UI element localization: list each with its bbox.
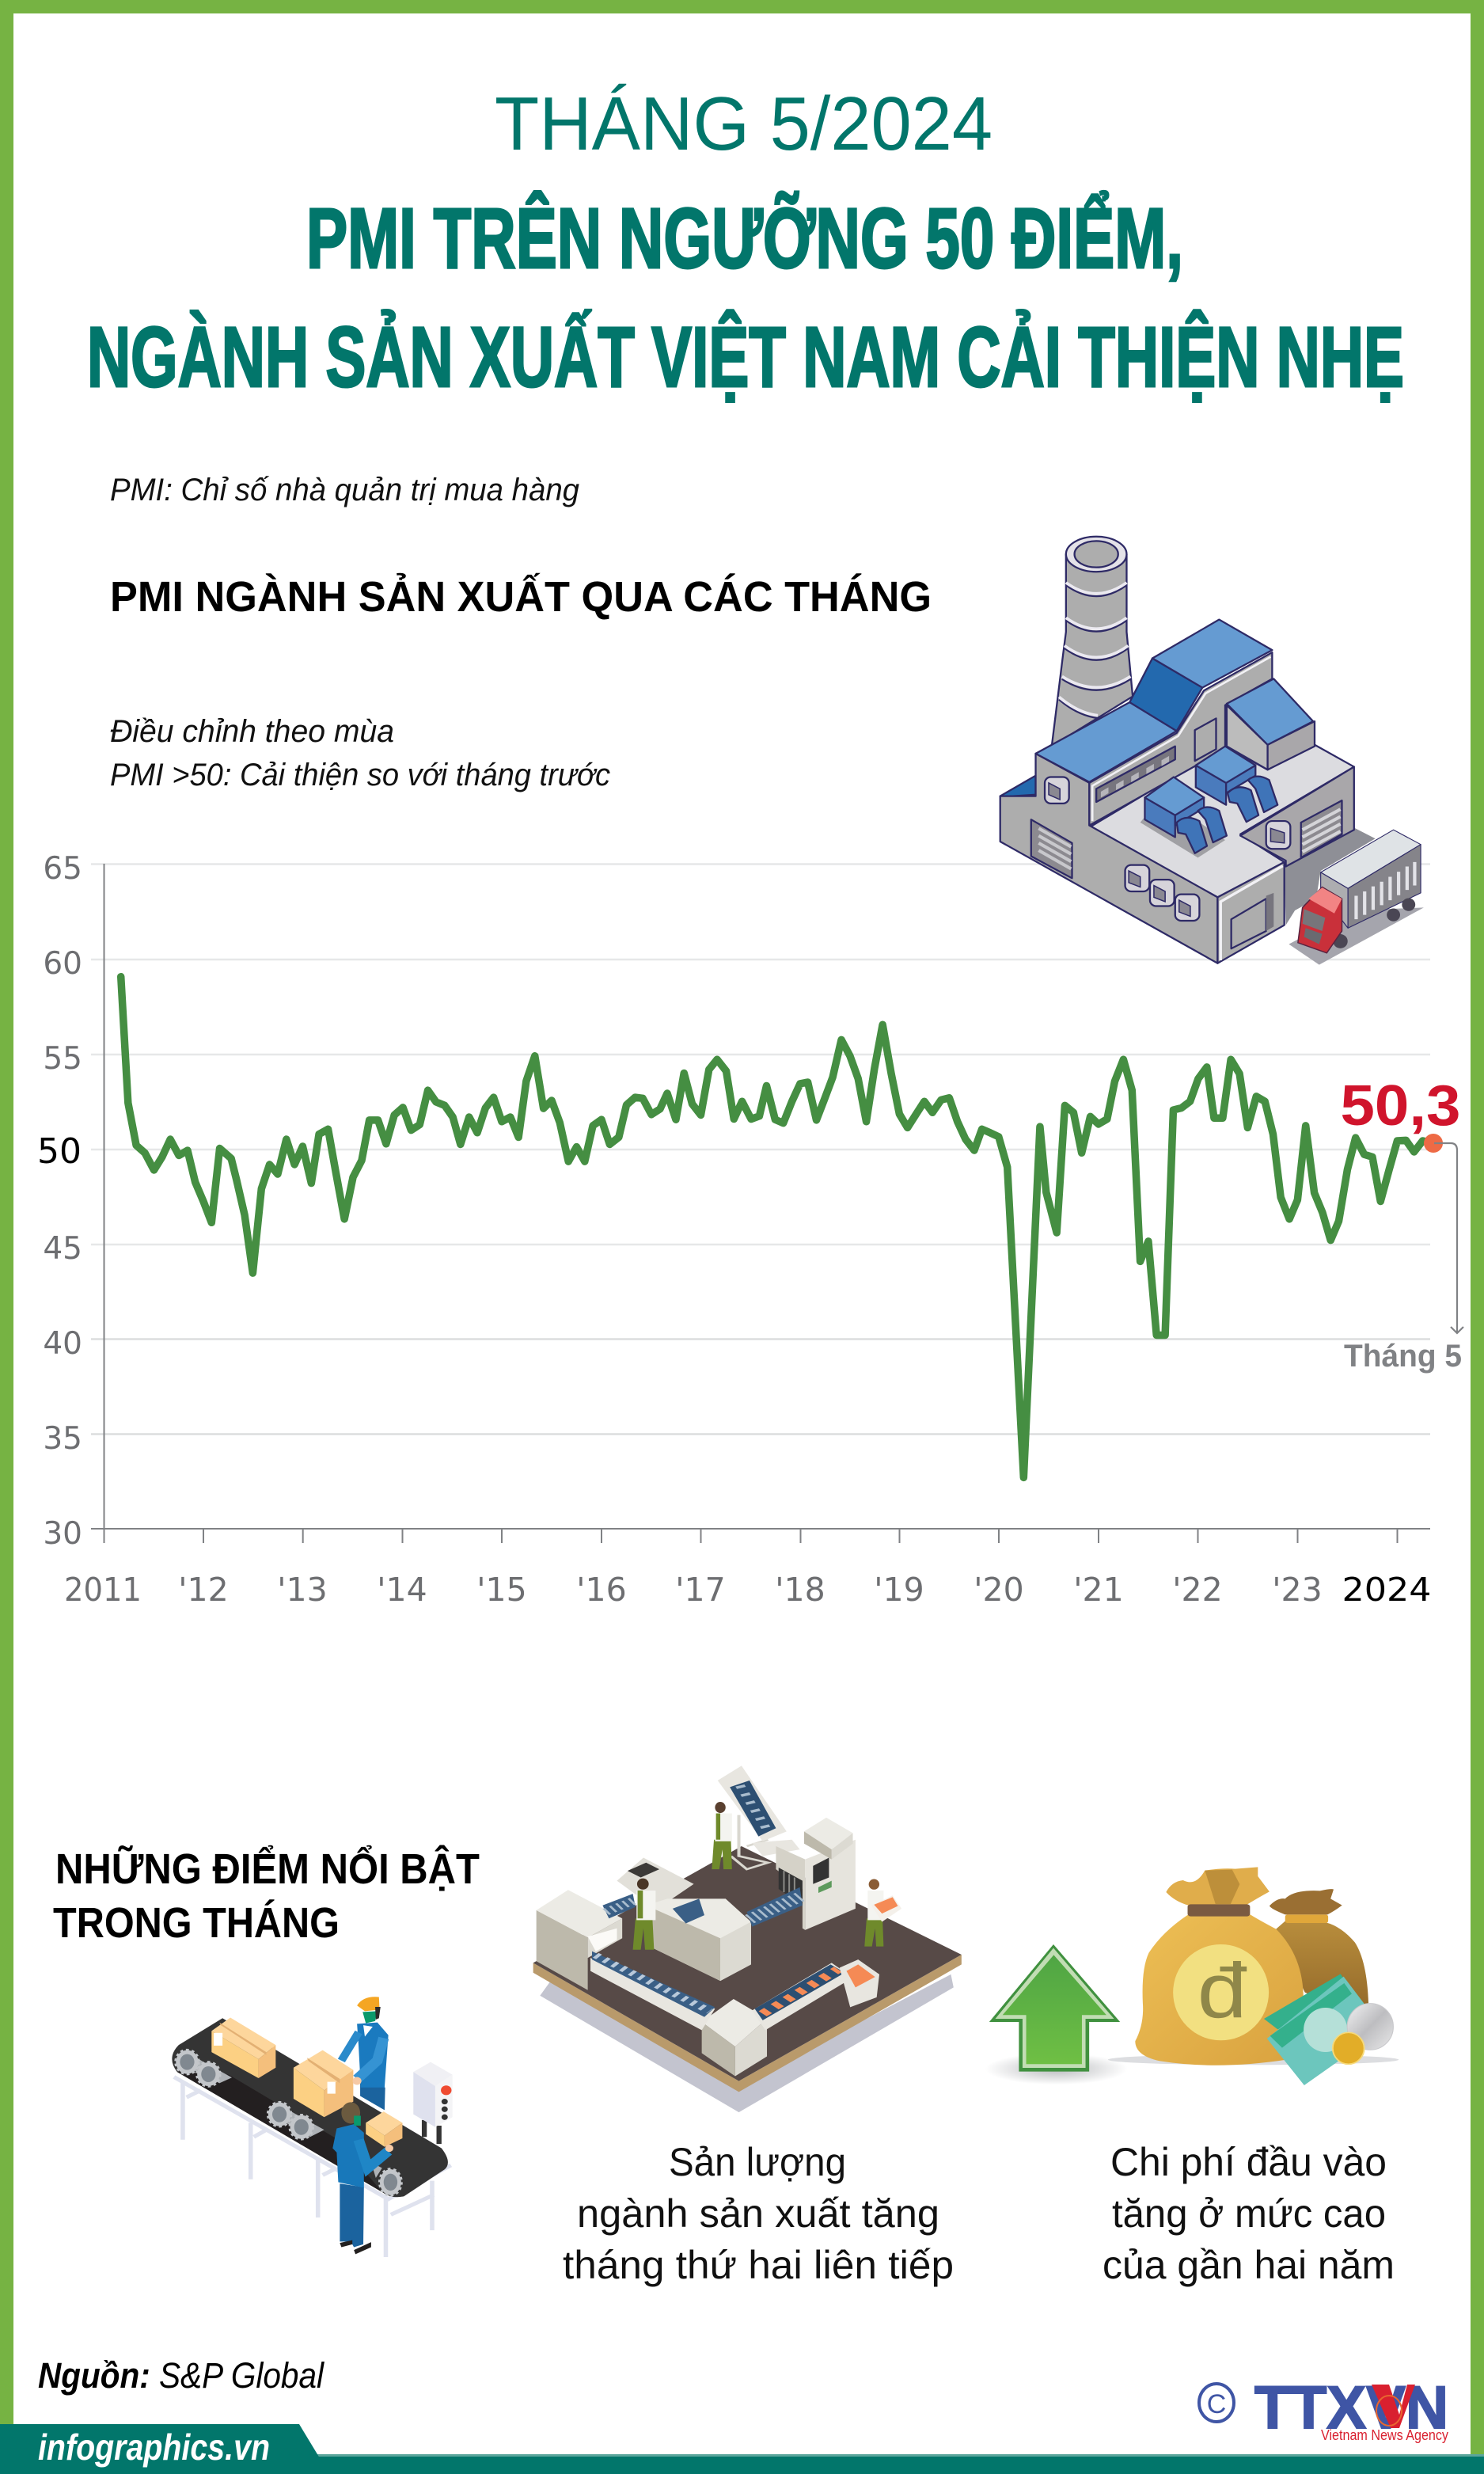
worker front [332,2102,393,2254]
y axis labels: 40 [43,1326,82,1362]
x axis labels: 2011 [64,1571,142,1609]
icon: production line platform [533,1765,962,2112]
worker back [341,1997,389,2110]
x axis labels: '20 [974,1571,1024,1609]
icon: up arrow [985,1944,1128,2084]
logo: TTXVN: TTXVN [1254,2374,1448,2442]
y axis labels: 45 [43,1231,82,1267]
icon: money bags: đ [1197,1948,1247,2035]
heading: highlights: TRONG THÁNG [53,1899,340,1947]
y axis labels: 35 [43,1421,82,1457]
axes and ticks [91,864,1430,1543]
icon: money bags [1108,1867,1399,2085]
x axis labels: '15 [476,1571,527,1609]
caption: output: tháng thứ hai liên tiếp [563,2243,954,2287]
x axis labels: '16 [576,1571,627,1609]
arrow: leader to Tháng 5 [1434,1143,1463,1333]
x axis labels: '13 [277,1571,328,1609]
x axis labels: '17 [675,1571,726,1609]
title: PMI TRÊN NGƯỠNG 50 ĐIỂM, [306,190,1183,286]
caption: input costs: của gần hai năm [1103,2243,1395,2287]
caption: input costs: Chi phí đầu vào [1110,2140,1387,2184]
label: Tháng 5: Tháng 5 [1344,1339,1462,1374]
main bag [1135,1914,1304,2065]
callout: 50,3: 50,3 [1341,1074,1461,1138]
icon: factory with truck [1000,537,1424,965]
chart notes [110,714,610,792]
x axis labels [64,1571,1431,1609]
y axis labels: 65 [43,851,82,887]
caption: output [563,2140,954,2287]
back bag [1276,1921,1368,2013]
control box [413,2062,453,2144]
truck [1289,830,1424,965]
caption: input costs: tăng ở mức cao [1112,2191,1386,2236]
latest value marker [1424,1134,1443,1153]
line chart: PMI [37,851,1431,1609]
x axis labels: '14 [377,1571,427,1609]
chute frame [718,1765,800,1869]
y axis labels: 30 [43,1516,82,1552]
x axis labels: '12 [178,1571,229,1609]
footer band [0,2424,1484,2474]
logo: TTXVN: C [1207,2389,1226,2419]
caption: input costs [1103,2140,1395,2287]
cardboard boxes [211,2018,402,2147]
heading: highlights: NHỮNG ĐIỂM NỔI BẬT [55,1845,480,1893]
PMI data line [121,977,1431,1477]
roller shafts [192,2055,382,2178]
y axis labels: 50 [37,1131,82,1172]
PMI definition note: PMI: Chỉ số nhà quản trị mua hàng [110,473,579,507]
icon: conveyor belt with workers [172,1997,453,2257]
caption: output: Sản lượng [669,2140,846,2184]
x axis labels: 2024 [1342,1571,1431,1609]
caption: output: ngành sản xuất tăng [577,2191,939,2236]
chart heading: PMI NGÀNH SẢN XUẤT QUA CÁC THÁNG [110,573,932,621]
x axis labels: '19 [874,1571,924,1609]
title: THÁNG 5/2024 [495,82,992,166]
y axis labels: 60 [43,946,82,982]
coins [1347,2004,1393,2050]
x axis labels: '23 [1272,1571,1323,1609]
logo: TTXVN: Vietnam News Agency [1321,2427,1448,2443]
y axis labels: 55 [43,1041,82,1077]
source: Nguồn: S&P Global [38,2355,325,2396]
x axis labels: '22 [1172,1571,1223,1609]
heading: highlights [53,1845,480,1947]
conveyors [590,1887,879,2030]
machines [537,1818,856,2076]
blue cargo group [1141,747,1277,857]
people [633,1802,901,1950]
chart notes: PMI >50: Cải thiện so với tháng trước [110,758,610,792]
banknotes [1264,1974,1360,2029]
title [87,82,1404,405]
x axis labels: '21 [1073,1571,1124,1609]
footer site name: infographics.vn [38,2426,270,2468]
y axis labels [37,851,82,1552]
chart notes: Điều chỉnh theo mùa [110,714,394,749]
x axis labels: '18 [775,1571,825,1609]
